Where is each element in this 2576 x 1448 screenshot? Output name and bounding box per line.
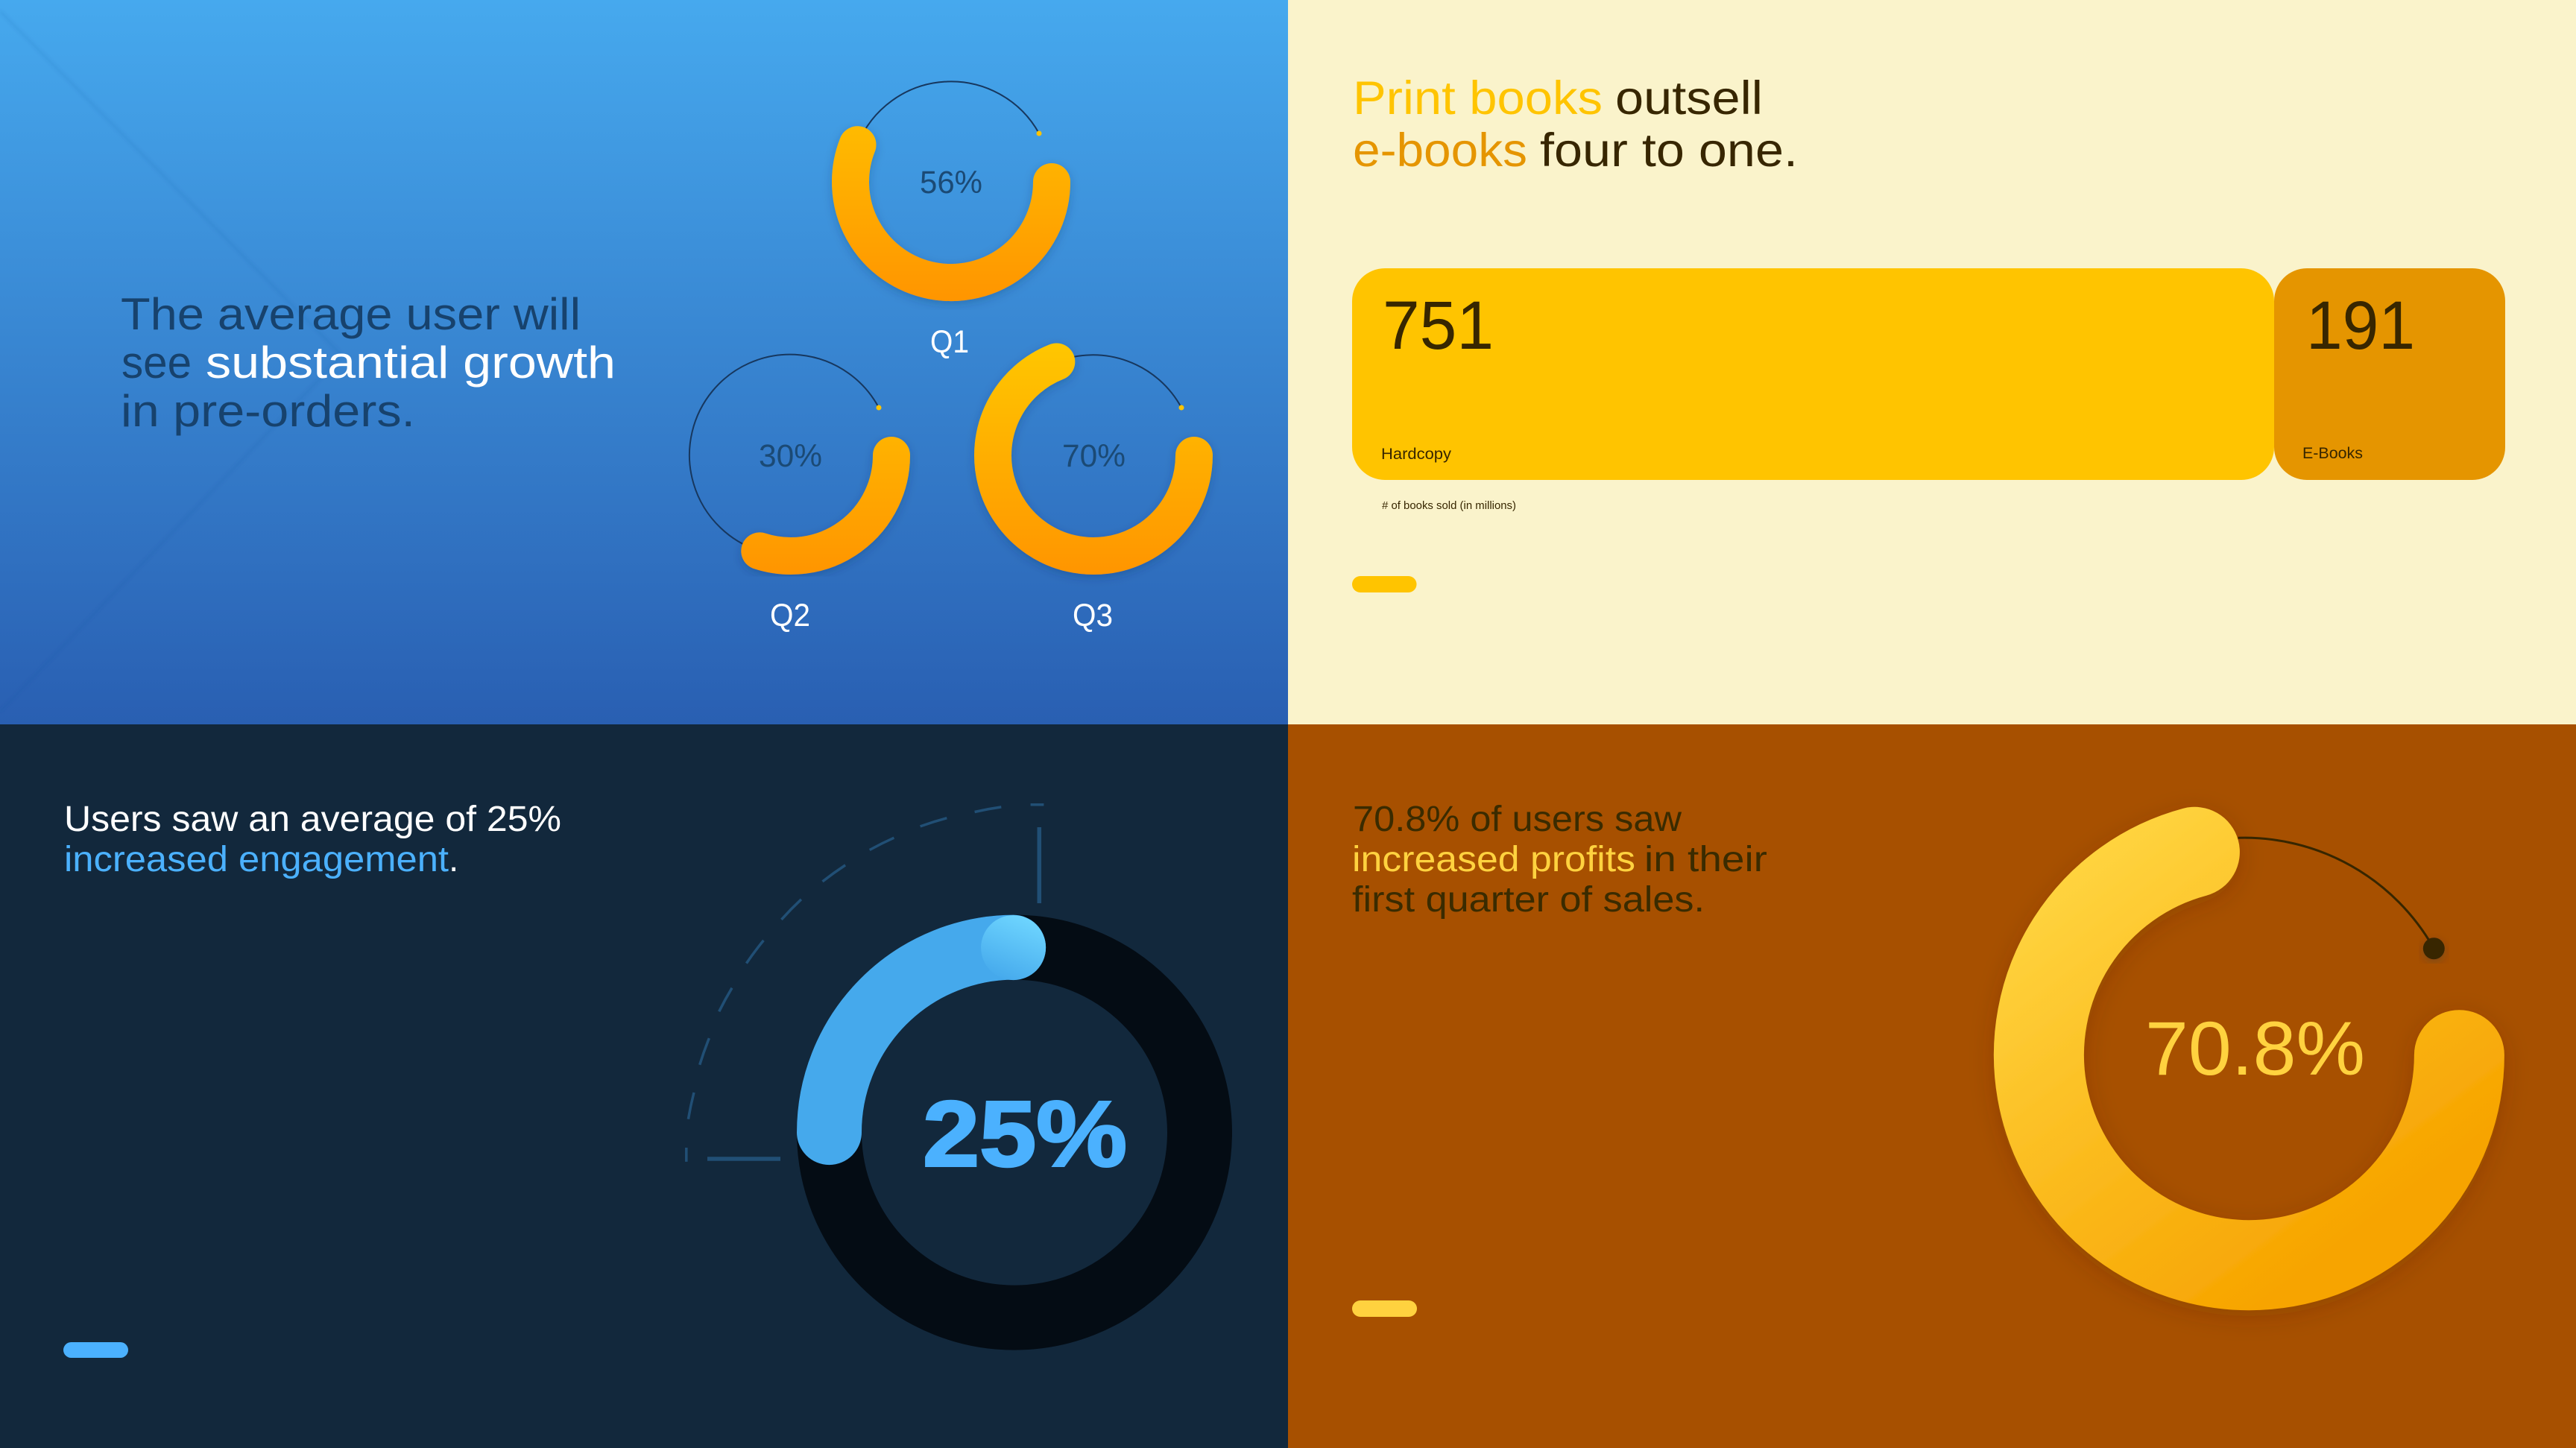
- chart: Q1 donut 56%: 56%: [920, 165, 982, 200]
- chart: Q3 donut 70%: Q3: [1073, 598, 1113, 633]
- bar: e-books 191: E-Books: [2302, 445, 2363, 462]
- heading: print books outsell e-books: e-books: [1353, 124, 1527, 177]
- chart: Q3 donut 70%: 70%: [1062, 438, 1126, 474]
- heading: increased engagement: increased engagement: [64, 840, 449, 879]
- heading: increased profits: 70.8% of users saw: [1353, 800, 1682, 839]
- panel: print vs e-books: [1288, 0, 2576, 724]
- panel: pre-orders growth: [0, 0, 1288, 724]
- chart: 70.8% donut: [2039, 838, 2459, 1265]
- heading: print books outsell e-books: [1353, 72, 1798, 177]
- chart: 25% donut: [829, 915, 1200, 1318]
- chart: Q2 donut 30%: Q2: [770, 598, 810, 633]
- chart: 70.8% donut: 70.8%: [2145, 1006, 2365, 1091]
- accent pill: [1352, 1300, 1417, 1317]
- heading: print books outsell e-books: Print books: [1353, 72, 1603, 124]
- chart: Q1 donut 56%: [850, 81, 1052, 360]
- heading: print books outsell e-books: outsell: [1615, 72, 1763, 124]
- heading: increased profits: increased profits: [1352, 840, 1635, 879]
- bar: e-books 191: 191: [2306, 288, 2415, 364]
- heading: average user growth: substantial growth: [206, 338, 616, 388]
- decoration: dashed quarter arc with guides: [686, 805, 1044, 1162]
- panel: engagement: [0, 724, 1288, 1448]
- panel: profits: [1288, 724, 2576, 1448]
- heading: average user growth: see: [121, 338, 192, 388]
- heading: increased engagement: .: [449, 840, 458, 879]
- heading: print books outsell e-books: four to one.: [1540, 124, 1798, 177]
- heading: increased profits: first quarter of sales.: [1352, 880, 1705, 920]
- chart: Q2 donut 30%: [689, 355, 891, 633]
- note: unit of measure: # of books sold (in millions): [1382, 500, 1516, 512]
- heading: increased profits: [1352, 800, 1767, 920]
- chart: Q2 donut 30%: 30%: [759, 438, 822, 474]
- heading: increased engagement: Users saw an average of 25%: [64, 800, 561, 839]
- accent pill: [1352, 576, 1416, 592]
- chart: Q3 donut 70%: [993, 355, 1194, 633]
- bar: hardcopy 751: Hardcopy: [1381, 446, 1452, 463]
- heading: increased profits: in their: [1644, 840, 1767, 879]
- heading: increased engagement: [64, 800, 561, 879]
- bar: hardcopy 751: 751: [1383, 288, 1494, 364]
- chart: Q1 donut 56%: Q1: [930, 324, 969, 360]
- bar: e-books 191: [2274, 268, 2505, 480]
- chart: 25% donut: 25%: [923, 1082, 1127, 1186]
- heading: average user growth: in pre-orders.: [121, 386, 415, 436]
- bar: hardcopy 751: [1352, 268, 2274, 480]
- heading: average user growth: The average user will: [121, 289, 581, 339]
- heading: average user growth: [121, 289, 616, 436]
- accent pill: [63, 1342, 128, 1358]
